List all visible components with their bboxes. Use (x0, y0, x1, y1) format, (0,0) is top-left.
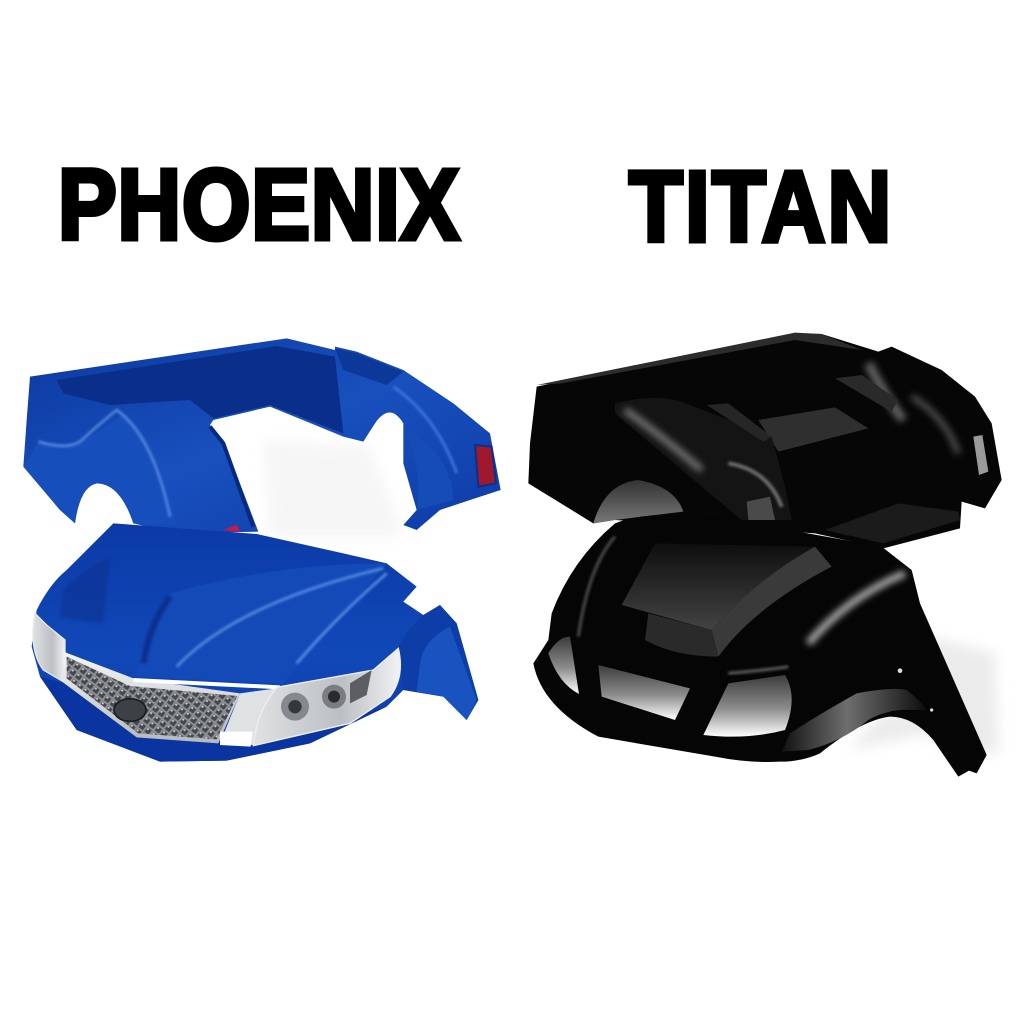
lower fender band (782, 689, 927, 752)
mounting holes (898, 668, 902, 673)
fender highlight (808, 573, 905, 643)
wheel arch (593, 480, 683, 523)
front cowl: black hood (533, 514, 987, 777)
front cowl: blue hood (32, 523, 478, 762)
title: TITAN: TITAN (629, 151, 891, 262)
right headlight (220, 648, 400, 747)
shadow: fender (848, 637, 998, 753)
rear marker opening (973, 435, 988, 475)
product: Titan black golf cart body kit (528, 333, 1002, 777)
grille openings (548, 637, 579, 694)
tail light: red (475, 445, 496, 487)
grille: chrome mesh with emblem (63, 652, 280, 743)
rear body: black (528, 333, 1002, 548)
raised hood panel (622, 543, 815, 630)
left lamp (33, 613, 65, 683)
title: PHOENIX: PHOENIX (58, 149, 459, 260)
rear body: blue (23, 338, 501, 537)
product: Phoenix blue golf cart body kit (23, 338, 501, 762)
